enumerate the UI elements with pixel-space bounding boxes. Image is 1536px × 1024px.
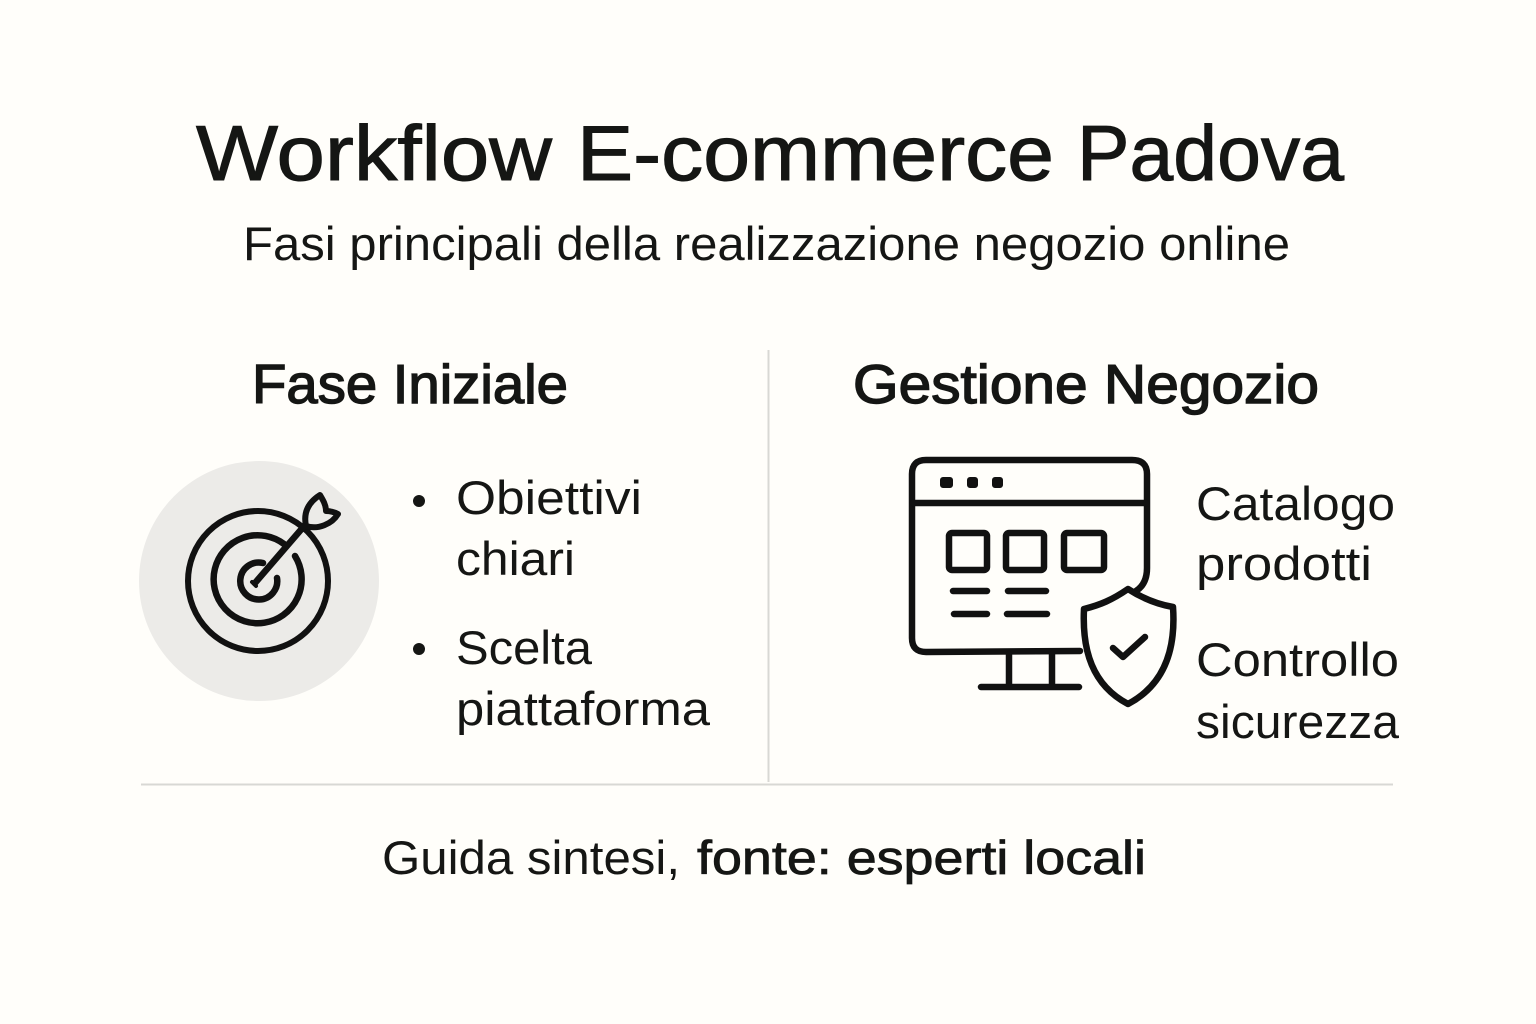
subtitle: Fasi principali della realizzazione negozio online	[243, 217, 1290, 270]
item: controllo sicurezza: sicurezza	[1196, 695, 1400, 748]
item: obiettivi chiari: chiari	[456, 532, 575, 585]
item: scelta piattaforma: piattaforma	[456, 682, 711, 735]
icon: target with arrow	[139, 461, 379, 701]
title: E-commerce	[577, 109, 1054, 197]
title: Padova	[1077, 109, 1345, 197]
footer note: fonte: esperti locali	[697, 831, 1146, 884]
heading: gestione negozio: Gestione Negozio	[853, 353, 1319, 415]
item: catalogo prodotti	[1196, 477, 1395, 590]
item: scelta piattaforma	[456, 621, 711, 735]
item: obiettivi chiari: Obiettivi	[456, 471, 642, 524]
list: obiettivi e piattaforma	[413, 471, 711, 735]
item: obiettivi chiari	[456, 471, 642, 585]
footer note: Guida sintesi,	[382, 831, 680, 884]
title: Workflow	[196, 109, 553, 197]
item: controllo sicurezza	[1196, 633, 1400, 748]
item: scelta piattaforma: Scelta	[456, 621, 593, 674]
panel: gestione negozio	[853, 353, 1400, 748]
panel: fase iniziale	[139, 353, 711, 735]
item: catalogo prodotti: prodotti	[1196, 537, 1372, 590]
item: catalogo prodotti: Catalogo	[1196, 477, 1395, 530]
list: catalogo e sicurezza	[1196, 477, 1400, 748]
heading: fase iniziale: Fase Iniziale	[252, 353, 568, 415]
bullet	[413, 643, 425, 655]
icon: monitor with shield	[912, 460, 1173, 704]
bullet	[413, 495, 425, 507]
footer note	[382, 831, 1146, 884]
item: controllo sicurezza: Controllo	[1196, 633, 1399, 686]
title	[196, 109, 1345, 197]
